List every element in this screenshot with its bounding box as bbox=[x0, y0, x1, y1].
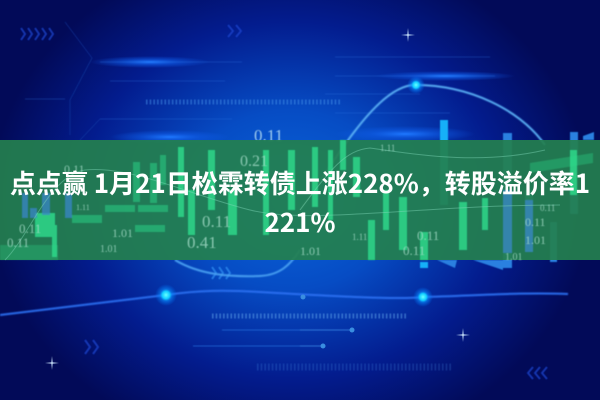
number label above band: 0.11 bbox=[254, 126, 283, 145]
faint horizontal lines bbox=[25, 22, 495, 346]
chart value labels: 1.01 bbox=[300, 244, 321, 258]
chart value labels: 1.11 bbox=[76, 203, 90, 212]
chart value labels: 0.11 bbox=[525, 215, 546, 229]
chart value labels: 1.01 bbox=[505, 252, 522, 263]
chart value labels: 0.41 bbox=[187, 233, 217, 252]
chart value labels: 0.11 bbox=[19, 221, 41, 236]
glowing dots bbox=[155, 76, 433, 348]
title: 点点赢 1月21日松霖转债上涨228%，转股溢价率1 bbox=[10, 164, 590, 201]
curve lines bbox=[0, 85, 568, 315]
chart value labels bbox=[7, 143, 555, 263]
green title band bbox=[0, 140, 600, 260]
chart value labels: 0.11 bbox=[403, 243, 425, 258]
chart value labels: 1.01 bbox=[525, 233, 546, 247]
chart value labels: 1.01 bbox=[112, 226, 133, 240]
chart value labels: 0.11 bbox=[540, 203, 555, 213]
chart value labels: 0.21 bbox=[240, 153, 268, 170]
pale chart lines on band bbox=[5, 148, 560, 260]
chart value labels: 0.11 bbox=[7, 235, 29, 250]
green candlesticks bbox=[0, 140, 593, 260]
chart value labels: 1.11 bbox=[352, 232, 367, 242]
sparkles bbox=[45, 28, 470, 370]
chart value labels: 0.11 bbox=[417, 228, 439, 243]
chart value labels: 1.01 bbox=[100, 244, 118, 255]
title: 221% bbox=[264, 203, 336, 240]
blue candlesticks bbox=[420, 120, 594, 270]
glow streaks bbox=[90, 56, 515, 144]
chart value labels: 0.11 bbox=[64, 162, 85, 176]
chevrons bbox=[21, 25, 547, 379]
chart value labels: 1.11 bbox=[380, 143, 395, 153]
dotted data rows bbox=[146, 102, 453, 367]
chart value labels: 0.11 bbox=[202, 212, 231, 231]
title bbox=[10, 164, 590, 240]
